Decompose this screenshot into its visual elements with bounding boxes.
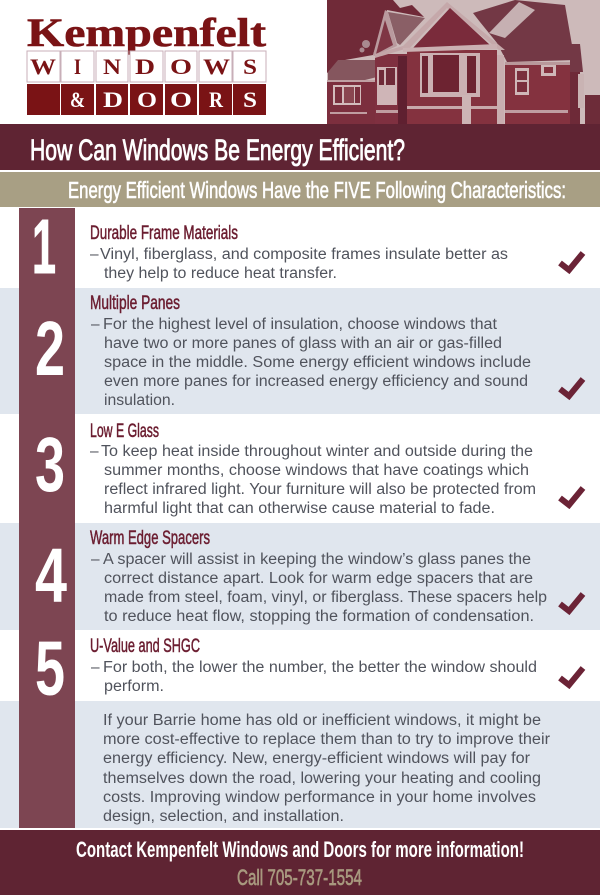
item 2 xyxy=(35,293,583,409)
logo doors row xyxy=(27,84,266,115)
body 5: perform. xyxy=(104,678,164,695)
logo wordmark: Kempenfelt xyxy=(27,10,267,55)
logo windows row: N xyxy=(103,54,121,79)
body 5: For both, the lower the number, the better the window should xyxy=(103,659,537,676)
body 2: have two or more panes of glass with an air or gas-filled xyxy=(104,335,502,352)
logo windows row: D xyxy=(135,54,155,79)
check 1 xyxy=(560,253,583,270)
number 1: 1 xyxy=(32,204,56,290)
logo doors row: O xyxy=(137,87,157,112)
body 2: For the highest level of insulation, choose windows that xyxy=(103,316,498,333)
item 1 xyxy=(32,204,583,290)
closing paragraph: energy efficiency. New, energy-efficient windows will pay for xyxy=(103,750,530,767)
logo doors row: D xyxy=(103,87,123,112)
body 1: they help to reduce heat transfer. xyxy=(104,265,337,282)
body 1: Vinyl, fiberglass, and composite frames insulate better as xyxy=(100,246,508,263)
body 4: – xyxy=(91,551,100,568)
logo windows row xyxy=(27,51,266,82)
logo windows row: W xyxy=(203,54,230,79)
heading 1: Durable Frame Materials xyxy=(90,223,238,244)
closing paragraph: If your Barrie home has old or inefficient windows, it might be xyxy=(103,712,541,729)
body 2: – xyxy=(91,316,100,333)
body 2 xyxy=(91,316,531,409)
phone number: Call 705-737-1554 xyxy=(237,865,362,890)
row backgrounds xyxy=(0,288,600,828)
body 3: – xyxy=(90,443,99,460)
check 4 xyxy=(560,594,583,611)
heading 4: Warm Edge Spacers xyxy=(90,528,210,549)
body 1: – xyxy=(90,246,99,263)
body 3: summer months, choose windows that have coatings which xyxy=(104,462,529,479)
closing paragraph: design, selection, and installation. xyxy=(103,808,344,825)
item 3 xyxy=(35,421,583,517)
logo doors row: O xyxy=(170,87,192,112)
footer xyxy=(0,830,600,895)
number sidebar xyxy=(19,208,75,828)
item 5 xyxy=(35,626,583,712)
body 3: harmful light that can otherwise cause material to fade. xyxy=(104,500,495,517)
body 5 xyxy=(91,659,537,695)
closing paragraph xyxy=(103,712,550,825)
body 3: To keep heat inside throughout winter and outside during the xyxy=(101,443,533,460)
body 1 xyxy=(90,246,508,282)
number 3: 3 xyxy=(35,422,65,508)
heading 3: Low E Glass xyxy=(90,421,159,442)
closing paragraph: more cost-effective to replace them than to try to improve their xyxy=(103,731,550,748)
body 2: space in the middle. Some energy efficient windows include xyxy=(104,354,531,371)
logo doors row: R xyxy=(209,87,224,112)
number 2: 2 xyxy=(35,306,65,392)
body 3 xyxy=(90,443,536,517)
logo windows row: I xyxy=(74,54,81,79)
logo windows row: O xyxy=(170,54,192,79)
logo doors row: S xyxy=(243,87,257,112)
body 2: insulation. xyxy=(104,392,175,409)
body 4: made from steel, foam, vinyl, or fiberglass. These spacers help xyxy=(104,589,547,606)
body 3: reflect infrared light. Your furniture will also be protected from xyxy=(104,481,536,498)
body 4: to reduce heat flow, stopping the formation of condensation. xyxy=(104,608,534,625)
logo xyxy=(27,10,267,115)
number 5: 5 xyxy=(35,626,65,712)
body 4: correct distance apart. Look for warm edge spacers that are xyxy=(104,570,533,587)
check 5 xyxy=(560,668,583,685)
body 5: – xyxy=(91,659,100,676)
closing paragraph: costs. Improving window performance in your home involves xyxy=(103,789,536,806)
subtitle banner xyxy=(0,172,600,207)
heading 2: Multiple Panes xyxy=(90,293,180,314)
body 4 xyxy=(91,551,547,625)
item 4 xyxy=(35,528,583,625)
house photo xyxy=(327,0,600,124)
logo windows row: W xyxy=(30,54,56,79)
title: How Can Windows Be Energy Efficient? xyxy=(30,134,405,167)
heading 5: U-Value and SHGC xyxy=(90,636,200,657)
number 4: 4 xyxy=(35,533,67,619)
title banner xyxy=(0,124,600,170)
closing paragraph: themselves down the road, lowering your heating and cooling xyxy=(103,770,541,787)
check 3 xyxy=(560,488,583,505)
logo windows row: S xyxy=(243,54,257,79)
body 4: A spacer will assist in keeping the window’s glass panes the xyxy=(103,551,531,568)
body 2: even more panes for increased energy efficiency and sound xyxy=(104,373,528,390)
logo doors row: & xyxy=(70,87,85,112)
check 2 xyxy=(560,379,583,396)
